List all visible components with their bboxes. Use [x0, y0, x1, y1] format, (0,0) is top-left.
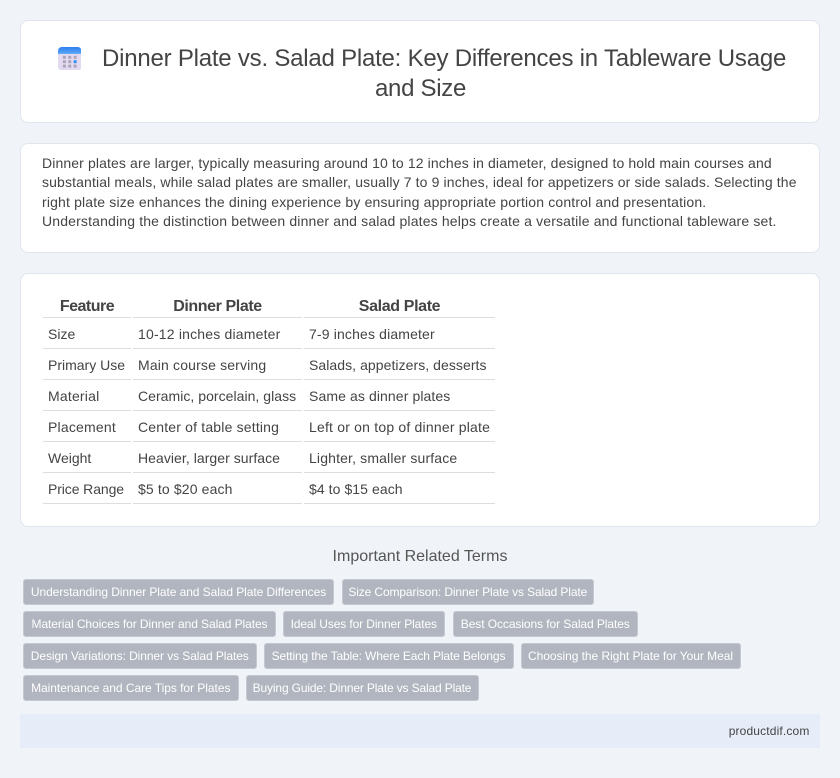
table rows: $5 to $20 each [138, 481, 233, 497]
table rows: Center of table setting [138, 419, 279, 435]
table rows: Placement [48, 419, 116, 435]
table rows: Heavier, larger surface [138, 450, 280, 466]
table header: Dinner Plate [173, 298, 262, 315]
title: and Size [375, 75, 466, 102]
table rows: Salads, appetizers, desserts [309, 357, 487, 373]
intro paragraph: right plate size enhances the dining experience by ensuring appropriate portion control and presentation. [42, 194, 706, 210]
table rows: Weight [48, 450, 91, 466]
table rows: 7-9 inches diameter [309, 326, 435, 342]
panel: comparison table [20, 273, 820, 527]
table rows: $4 to $15 each [309, 481, 403, 497]
table rows: Left or on top of dinner plate [309, 419, 490, 435]
panel: intro text [20, 143, 820, 253]
table rows: Price Range [48, 481, 124, 497]
related term tags: Maintenance and Care Tips for Plates [31, 681, 230, 695]
intro paragraph: Dinner plates are larger, typically measuring around 10 to 12 inches in diameter, designed to hold main courses and [42, 154, 772, 170]
icon: calendar [58, 47, 81, 70]
related term tags: Size Comparison: Dinner Plate vs Salad Plate [348, 585, 587, 599]
related term tags: Material Choices for Dinner and Salad Plates [32, 617, 267, 631]
table rows: Ceramic, porcelain, glass [138, 388, 296, 404]
title card [20, 20, 820, 123]
table rows: Same as dinner plates [309, 388, 450, 404]
table rows: 10-12 inches diameter [138, 326, 281, 342]
table rows: Size [48, 326, 75, 342]
table header: Feature [60, 298, 114, 315]
intro paragraph [42, 154, 797, 229]
title [102, 45, 786, 102]
footer text: productdif.com [729, 724, 810, 738]
related term tags: Buying Guide: Dinner Plate vs Salad Plate [253, 681, 471, 695]
footer [20, 714, 820, 748]
related term tags: Setting the Table: Where Each Plate Belongs [272, 649, 505, 663]
intro paragraph: Understanding the distinction between dinner and salad plates helps create a versatile and functional tableware set. [42, 213, 777, 229]
heading: related terms: Important Related Terms [333, 548, 507, 565]
related term tags: Best Occasions for Salad Plates [461, 617, 630, 631]
table header [60, 298, 440, 315]
related term tags: Choosing the Right Plate for Your Meal [528, 649, 733, 663]
related term tags [23, 579, 741, 701]
title: Dinner Plate vs. Salad Plate: Key Differences in Tableware Usage [102, 45, 786, 72]
table rows [43, 317, 495, 504]
table rows: Lighter, smaller surface [309, 450, 457, 466]
related term tags: Ideal Uses for Dinner Plates [291, 617, 437, 631]
table header: Salad Plate [359, 298, 440, 315]
table rows: Material [48, 388, 99, 404]
table rows: Main course serving [138, 357, 266, 373]
intro paragraph: substantial meals, while salad plates are smaller, usually 7 to 9 inches, ideal for appetizers or side salads. Selecting the [42, 174, 797, 190]
related term tags: Design Variations: Dinner vs Salad Plates [31, 649, 249, 663]
table rows: Primary Use [48, 357, 125, 373]
related term tags: Understanding Dinner Plate and Salad Plate Differences [31, 585, 326, 599]
